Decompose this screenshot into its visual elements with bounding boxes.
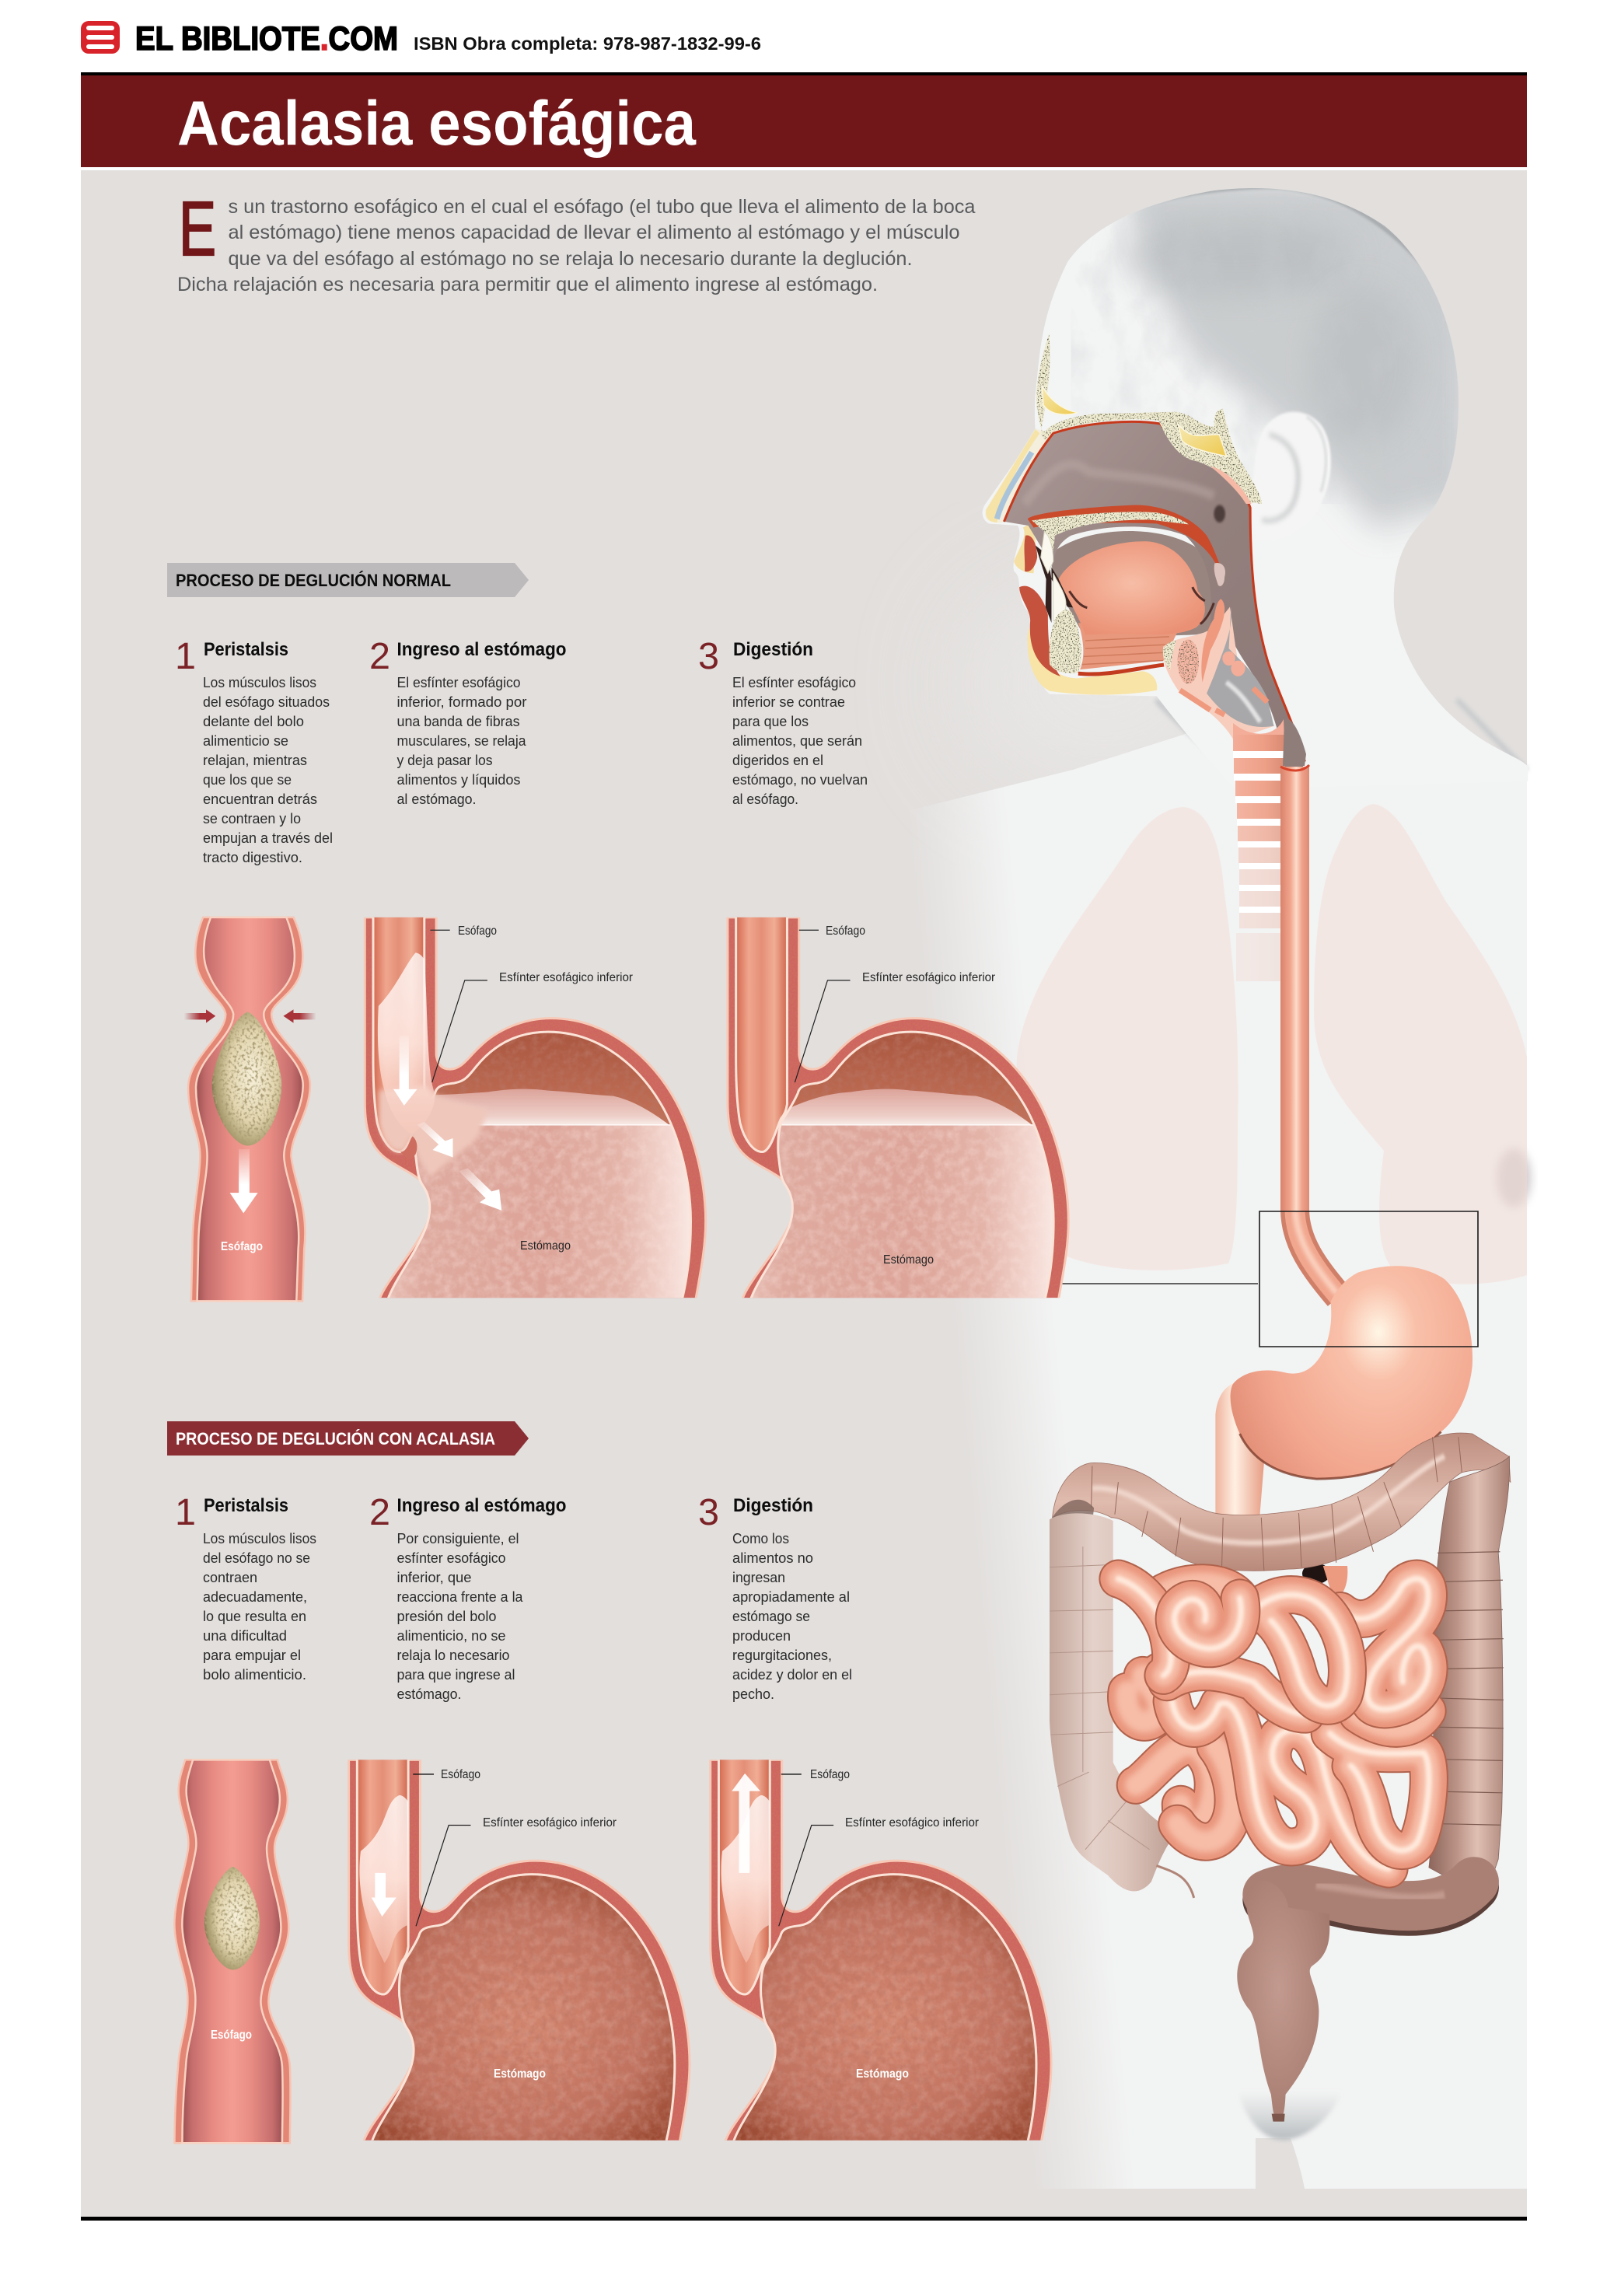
step 1 normal: tracto digestivo. [203,849,302,865]
rectum [1237,1881,1329,2122]
label esfínter: Esfínter esofágico inferior [499,971,633,984]
label esófago: Esófago [810,1768,850,1781]
step 1 normal: Peristalsis [204,639,288,660]
drop cap: E [179,186,216,271]
teeth [1041,532,1066,620]
step 1 achalasia: Los músculos lisos [203,1530,316,1546]
small intestine [1118,1579,1429,1869]
floor of mouth muscle [1078,623,1182,669]
step 2 normal: El esfínter esofágico [397,674,521,690]
sublingual red line [1078,665,1164,674]
airway lining [1004,421,1305,762]
intro text: Dicha relajación es necesaria para permitir que el alimento ingrese al estómago. [177,274,878,295]
label esófago: Esófago [826,924,865,938]
step 2 achalasia: relaja lo necesario [397,1647,510,1663]
step 3 normal: estómago, no vuelvan [732,771,868,788]
step 1 normal: se contraen y lo [203,810,301,826]
head silhouette [983,188,1528,789]
step 1 normal: delante del bolo [203,713,304,729]
step 1 achalasia: bolo alimenticio. [203,1666,306,1683]
arrow down [393,1036,417,1106]
step 3 achalasia: Como los [732,1530,789,1546]
bottom black rule [81,2217,1527,2221]
retained food [359,1795,408,1963]
soft lighter glow beside neck [964,583,1244,785]
step 1 achalasia: lo que resulta en [203,1608,306,1624]
step 2 normal: musculares, se relaja [397,732,526,749]
step 2 achalasia: Por consiguiente, el [397,1530,519,1546]
auditory tube opening [1214,505,1225,522]
illustration: normal peristalsis tube [184,917,316,1301]
section banner: achalasia [167,1421,529,1456]
step 3 achalasia: acidez y dolor en el [732,1666,852,1683]
title: Acalasia esofágica [177,89,697,159]
logo icon [81,21,120,54]
illustration: normal stomach open sphincter [365,914,714,1302]
open sphincter passage [379,1085,488,1178]
red squeeze arrow right [283,1009,316,1023]
head [983,179,1528,789]
frontal and sphenoid bone [1036,334,1262,504]
step 1 normal: relajan, mientras [203,752,307,768]
step 3 normal: inferior se contrae [732,694,845,710]
label esófago: Esófago [441,1768,480,1781]
label estómago: Estómago [494,2067,546,2081]
connector line from detail to locator box [1062,1283,1258,1284]
step 2 normal: inferior, formado por [397,694,527,710]
tongue fissure [1069,587,1214,624]
bolus [204,1867,260,1969]
white direction arrow [230,1149,258,1213]
esophagus cut opening [1283,718,1306,766]
step 1 normal [175,636,333,865]
step 2 normal [369,636,566,807]
title band [81,75,1527,167]
step 2 normal: una banda de fibras [397,713,519,729]
red squeeze arrow left [184,1009,215,1023]
label estómago: Estómago [856,2067,909,2081]
step 3 achalasia: pecho. [732,1686,774,1702]
step 2 achalasia [369,1492,566,1702]
larynx highlight [1226,683,1260,722]
trachea rings [1233,719,1287,981]
nose skin fat [986,429,1039,522]
step 3 achalasia: alimentos no [732,1550,813,1566]
illustration: achalasia stomach, bolus descending [349,1756,698,2146]
intro text [177,186,976,295]
step 1 achalasia: 1 [175,1492,196,1533]
uvula [1214,563,1225,586]
airway cavity [1005,423,1303,767]
step 2 achalasia: Ingreso al estómago [397,1495,566,1516]
arrow up [732,1774,760,1873]
mandible [1050,610,1081,673]
step 2 achalasia: reacciona frente a la [397,1588,523,1605]
human body silhouette [855,700,1531,2189]
arrow diagonal 2 [459,1169,501,1211]
dark gap behind colon [1302,1564,1330,1584]
step 3 achalasia [698,1492,852,1702]
thyroid cartilage [1177,639,1199,684]
step 3 achalasia: estómago se [732,1608,810,1624]
palate bone [1032,512,1189,555]
label esfínter: Esfínter esofágico inferior [862,971,995,984]
larynx lumen [1207,607,1273,727]
soft fold in nasal cavity [1025,464,1214,504]
step 2 normal: al estómago. [397,791,476,807]
step 2 achalasia: alimenticio, no se [397,1627,505,1644]
label estómago: Estómago [883,1253,934,1267]
step 2 normal: 2 [369,636,390,677]
leader line esófago [430,930,450,931]
step 3 achalasia: apropiadamente al [732,1588,850,1605]
label esfínter: Esfínter esofágico inferior [483,1816,617,1829]
upper lip muscle [1024,535,1037,571]
section banner: achalasia: PROCESO DE DEGLUCIÓN CON ACALASIA [176,1429,495,1449]
arrow down [372,1873,397,1917]
step 1 achalasia [175,1492,316,1683]
step 1 achalasia: contraen [203,1569,257,1585]
sphenoid sinus [1178,425,1226,456]
step 2 achalasia: estómago. [397,1686,462,1702]
leader line esfínter [779,1826,833,1926]
step 1 normal: 1 [175,636,196,677]
intro text: que va del esófago al estómago no se relaja lo necesario durante la deglución. [229,248,913,270]
lungs [1017,804,1527,1284]
step 1 normal: del esófago situados [203,694,330,710]
step 2 normal: Ingreso al estómago [397,639,566,660]
label esófago: Esófago [458,924,497,938]
ascending colon and cecum [1050,1513,1194,1898]
logo [81,20,398,58]
retained food [721,1795,770,1963]
step 3 normal: El esfínter esofágico [732,674,856,690]
label esófago tube: Esófago [211,2029,252,2042]
nose tissue [985,428,1053,522]
intro text: s un trastorno esofágico en el cual el esófago (el tubo que lleva el alimento de la boca [229,196,976,218]
step 1 normal: alimenticio se [203,732,288,749]
step 1 normal: encuentran detrás [203,791,317,807]
section banner: normal [167,563,529,597]
duodenum [1215,1382,1264,1527]
ear [1252,412,1331,540]
bolus [212,1012,281,1145]
larynx tissue [1163,607,1274,739]
lower lip muscle [1019,586,1060,676]
label estómago: Estómago [520,1239,571,1253]
transverse colon [1053,1433,1511,1571]
cartilage bits [1180,688,1267,715]
illustration: achalasia tube [174,1760,291,2143]
intro text: al estómago) tiene menos capacidad de llevar el alimento al estómago y el músculo [229,222,959,243]
label esfínter: Esfínter esofágico inferior [845,1816,979,1829]
leader line esófago [781,1774,802,1775]
logo wordmark: EL BIBLIOTE.COM [135,20,398,58]
digestive tract [1050,1266,1511,2122]
step 2 normal: alimentos y líquidos [397,771,521,788]
illustration: normal stomach closed sphincter [728,914,1078,1302]
esophagus tube [1280,765,1339,1297]
step 3 achalasia: 3 [698,1492,719,1533]
chin fat [1027,627,1157,695]
step 1 achalasia: adecuadamente, [203,1588,307,1605]
step 1 achalasia: Peristalsis [204,1495,288,1516]
step 3 normal [698,636,868,807]
step 1 achalasia: una dificultad [203,1627,287,1644]
jejunum stub [1323,1566,1347,1599]
step 3 normal: digeridos en el [732,752,823,768]
step 1 normal: Los músculos lisos [203,674,316,690]
mouth cavity [1050,531,1230,638]
scalp shading [1071,179,1471,528]
oral gap [1036,546,1087,623]
step 2 achalasia: inferior, que [397,1569,471,1585]
arrow diagonal 1 [417,1122,452,1158]
locator box around stomach junction [1259,1211,1478,1347]
step 2 normal: y deja pasar los [397,752,493,768]
palate [1028,505,1221,568]
step 1 normal: que los que se [203,771,292,788]
leader line esfínter [416,1826,470,1926]
nose cartilage [997,453,1032,519]
leader line esfínter [795,980,851,1082]
tooth of the cardia fold [400,1137,417,1155]
floor striations [1081,637,1169,665]
top black rule [81,72,1527,75]
ISBN: ISBN Obra completa: 978-987-1832-99-6 [414,33,761,54]
step 3 normal: al esófago. [732,791,798,807]
step 1 achalasia: del esófago no se [203,1550,310,1566]
step 2 achalasia: esfínter esofágico [397,1550,505,1566]
step 3 achalasia: regurgitaciones, [732,1647,832,1663]
section banner: normal: PROCESO DE DEGLUCIÓN NORMAL [176,571,451,590]
food flow [378,952,435,1106]
step 1 achalasia: para empujar el [203,1647,301,1663]
step 3 normal: alimentos, que serán [732,732,862,749]
step 3 achalasia: ingresan [732,1569,785,1585]
step 3 normal: 3 [698,636,719,677]
step 1 normal: empujan a través del [203,830,333,846]
descending colon [1429,1456,1510,1895]
leader line esófago [413,1774,434,1775]
vocal folds [1222,652,1245,676]
stomach [1231,1266,1473,1479]
leader line esófago [799,930,819,931]
frontal sinus [1042,385,1078,414]
sigmoid colon [1267,1882,1474,1911]
illustration: achalasia stomach, regurgitation [711,1756,1060,2146]
step 2 achalasia: presión del bolo [397,1608,496,1624]
label esófago tube: Esófago [221,1240,263,1253]
step 3 normal: Digestión [733,639,813,660]
pharyngeal tonsil [1210,467,1251,504]
epiglottis [1201,599,1224,683]
step 2 achalasia: para que ingrese al [397,1666,515,1683]
stomach lower shadow [1240,1432,1441,1479]
hyoid [1163,641,1176,670]
step 3 achalasia: Digestión [733,1495,813,1516]
step 3 achalasia: producen [732,1627,791,1644]
step 2 achalasia: 2 [369,1492,390,1533]
step 3 normal: para que los [732,713,809,729]
leader line esfínter [432,980,487,1082]
upper lip [1014,524,1036,573]
tongue [1059,541,1205,634]
